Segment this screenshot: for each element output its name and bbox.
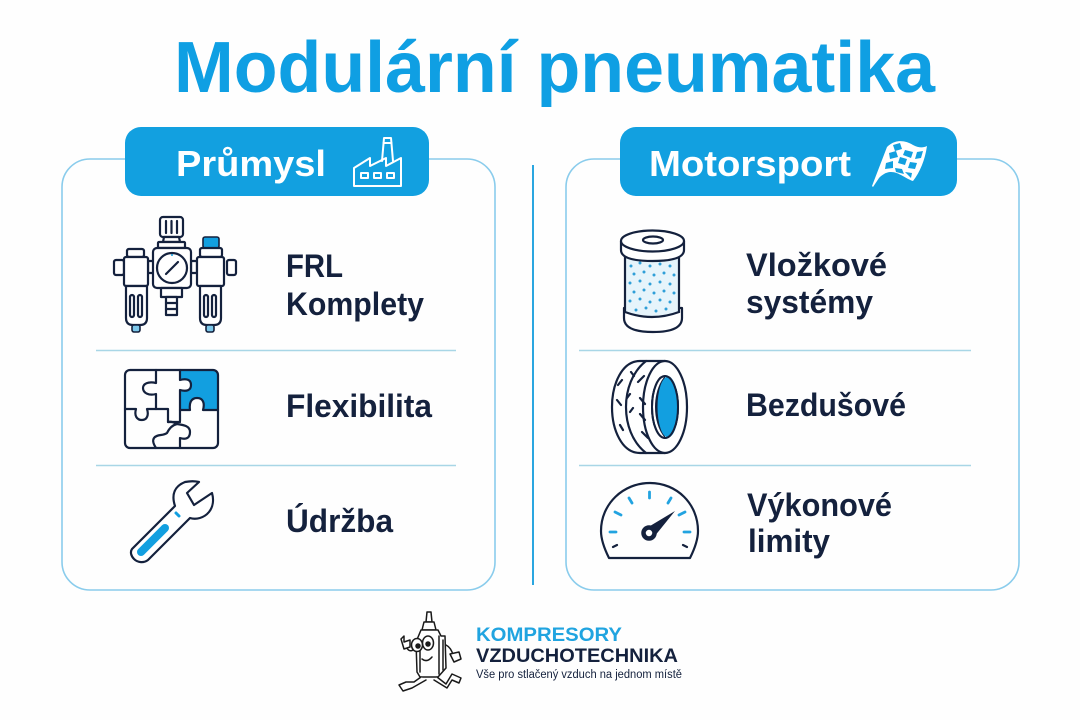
label: Údržba: Údržba [286,503,393,539]
label: FRL Komplety: FRL [286,248,343,284]
center divider [532,165,534,585]
icon: checkered flag [872,141,927,187]
panel header: Motorsport: Motorsport [649,143,851,184]
icon: FRL unit [114,217,236,332]
label: Vložkové systémy: systémy [746,284,873,320]
logo: Kompresory Vzduchotechnika: VZDUCHOTECHNIKA [476,645,678,667]
icon: speedometer [601,483,698,558]
logo: Kompresory Vzduchotechnika [399,612,682,691]
title: Modulární pneumatika [174,28,936,108]
icon: factory [354,138,401,186]
icon: wrench [131,481,213,562]
label: Výkonové limity: limity [748,523,830,559]
label: Výkonové limity [747,487,892,559]
panel: Motorsport [566,127,1019,590]
logo: Kompresory Vzduchotechnika: KOMPRESORY [476,624,622,646]
label: Vložkové systémy [746,247,887,320]
panel header: Průmysl [125,127,429,196]
label: Flexibilita: Flexibilita [286,388,432,424]
label: Bezdušové: Bezdušové [746,387,906,423]
icon: puzzle [125,370,218,448]
panel header: Motorsport [620,127,957,196]
panel header: Průmysl: Průmysl [176,143,326,184]
icon: compressor mascot [399,612,461,691]
icon: filter cartridge [621,230,684,332]
panel: Průmysl [62,127,495,590]
label: FRL Komplety [286,248,424,322]
icon: tire [612,361,687,453]
label: Vložkové systémy: Vložkové [746,247,887,283]
logo: Kompresory Vzduchotechnika: Vše pro stlačený vzduch na jednom místě [476,669,682,681]
label: FRL Komplety: Komplety [286,286,424,322]
label: Výkonové limity: Výkonové [747,487,892,523]
